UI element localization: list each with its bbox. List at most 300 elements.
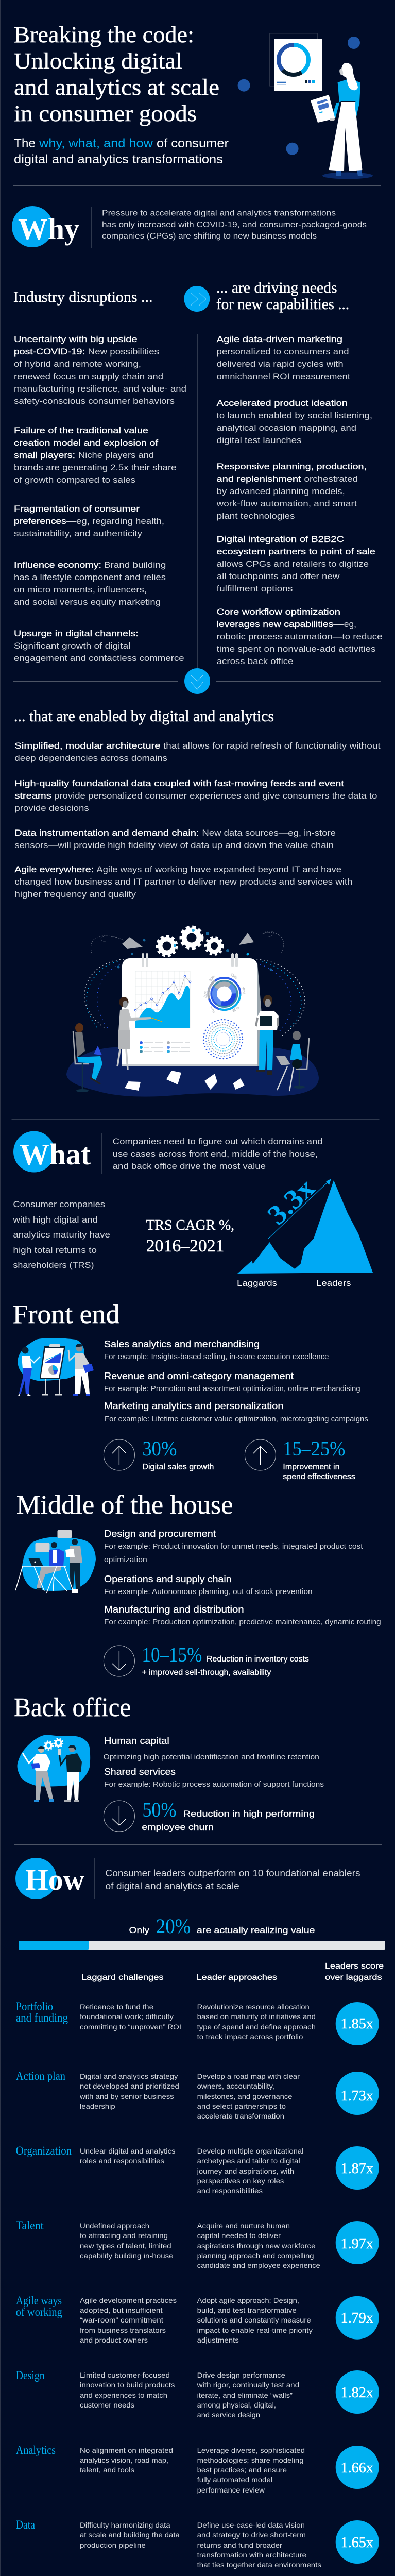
item: revenue management: For example: Promotion and assortment optimization, online merchandising bbox=[104, 1385, 360, 1393]
stat: spend effectiveness: spend effectiveness bbox=[283, 1472, 355, 1481]
enabler: agile: Agile ways of working have expanded beyond IT and have bbox=[96, 865, 341, 874]
heading: back office: Back office bbox=[14, 1693, 131, 1722]
table row: design: customer needs bbox=[80, 2401, 134, 2409]
stat: employee churn: Reduction in high performing bbox=[183, 1809, 315, 1819]
illustration: woman viewing a donut chart bbox=[238, 33, 373, 179]
item: operations: Operations and supply chain bbox=[104, 1574, 232, 1584]
figure: right man bbox=[69, 1746, 75, 1752]
capability: workflow: eg, bbox=[344, 619, 356, 629]
enabler: agile bbox=[14, 865, 352, 899]
table row: agile ways of working: build, and test transformative bbox=[197, 2306, 297, 2314]
chart: laggards vs leaders mountain: Laggards bbox=[237, 1278, 277, 1288]
stat: inventory costs bbox=[104, 1643, 309, 1677]
table row: organization: Develop multiple organizational bbox=[197, 2147, 304, 2155]
table row: action plan: accelerate transformation bbox=[197, 2112, 284, 2120]
table row: action plan: milestones, and governance bbox=[197, 2092, 293, 2100]
table row: data: at scale and building the data bbox=[80, 2531, 180, 2539]
illustration: two people at a chart board bbox=[18, 1338, 94, 1396]
disruption: fragmentation: sustainability, and authenticity bbox=[14, 529, 143, 538]
disruption: uncertainty: manufacturing resilience, and value- and bbox=[14, 384, 186, 394]
item: design and procurement: Design and procurement bbox=[104, 1529, 216, 1539]
item: manufacturing: For example: Production optimization, predictive maintenance, dynamic routing bbox=[104, 1618, 381, 1626]
table row: data: 1.65x bbox=[341, 2535, 373, 2551]
disruption: failure of value creation: small players: bbox=[14, 450, 75, 460]
capability: planning: Responsive planning, production, bbox=[217, 462, 367, 471]
table row: organization: perspectives on key roles bbox=[197, 2177, 284, 2185]
table row: analytics bbox=[16, 2444, 379, 2494]
table row: design: Limited customer-focused bbox=[80, 2371, 170, 2379]
table row: analytics: performance review bbox=[197, 2486, 265, 2494]
table row: analytics: Analytics bbox=[16, 2444, 56, 2456]
disruption: failure of value creation: brands are generating 2.5x their share bbox=[14, 463, 176, 472]
enabler: agile: Agile everywhere: bbox=[14, 865, 94, 874]
table row: data: production pipeline bbox=[80, 2541, 146, 2549]
item: marketing analytics: Marketing analytics and personalization bbox=[104, 1401, 283, 1411]
table row: talent: planning approach and compelling bbox=[197, 2251, 314, 2260]
table row: data bbox=[16, 2518, 379, 2569]
enabler: data: streams bbox=[14, 791, 51, 801]
subtitle: digital and analytics transformations bbox=[14, 152, 223, 166]
heading: TRS CAGR: 2016–2021 bbox=[146, 1236, 224, 1256]
what text: use cases across front end, middle of the house, bbox=[113, 1149, 318, 1159]
capability: product ideation: to launch enabled by social listening, bbox=[217, 411, 372, 420]
table row: portfolio and funding: and funding bbox=[16, 2011, 68, 2024]
what text: Companies need to figure out which domains and bbox=[113, 1137, 323, 1146]
capability: product ideation bbox=[217, 398, 372, 445]
disruption: failure of value creation: Niche players and bbox=[78, 450, 154, 460]
figure: seated with laptop bbox=[276, 1031, 309, 1091]
capability: marketing: delivered via rapid cycles with bbox=[217, 359, 344, 369]
enabler: agile: higher frequency and quality bbox=[14, 889, 136, 899]
capability: B2B2C: Digital integration of B2B2C bbox=[217, 534, 344, 544]
table row: organization: journey and aspirations, with bbox=[197, 2167, 294, 2175]
chart: laggards vs leaders mountain bbox=[237, 1172, 373, 1288]
title: Breaking the code: bbox=[14, 22, 194, 47]
capability: workflow bbox=[217, 607, 383, 666]
capability: B2B2C: all touchpoints and offer new bbox=[217, 571, 340, 581]
panel: industry disruptions list bbox=[14, 334, 186, 663]
table header: Leaders score bbox=[325, 1962, 384, 1971]
table row: data: that ties together data environments bbox=[197, 2561, 321, 2569]
disruption: uncertainty: Uncertainty with big upside bbox=[14, 334, 138, 344]
figure: standing woman bbox=[72, 1539, 78, 1545]
disruption: influence economy: on micro moments, influencers, bbox=[14, 585, 147, 595]
callout: only 20% realizing value bbox=[129, 1914, 315, 1938]
panel: enablers list bbox=[14, 741, 381, 899]
table row: agile ways of working: Agile ways bbox=[16, 2294, 62, 2307]
table row: data: returns and fund broader bbox=[197, 2541, 282, 2549]
illustration: people at a desk bbox=[15, 1530, 96, 1593]
table row: talent: Acquire and nurture human bbox=[197, 2222, 290, 2230]
chart: laggards vs leaders mountain: Leaders bbox=[316, 1278, 351, 1288]
table row: agile ways of working: 1.79x bbox=[341, 2310, 373, 2326]
what text bbox=[113, 1137, 323, 1171]
table row: portfolio and funding bbox=[16, 2000, 379, 2045]
enabler: instrumentation: sensors—will provide high fidelity view of data up and down the value chain bbox=[14, 840, 334, 850]
stat: digital sales growth bbox=[104, 1437, 214, 1471]
table row: design: Drive design performance bbox=[197, 2371, 285, 2379]
table row: agile ways of working bbox=[16, 2294, 379, 2344]
table row: action plan: Action plan bbox=[16, 2070, 65, 2082]
item: shared services bbox=[104, 1767, 324, 1789]
why text: Pressure to accelerate digital and analytics transformations bbox=[102, 209, 336, 217]
capability: marketing bbox=[217, 334, 350, 381]
table row: talent bbox=[16, 2219, 379, 2269]
enabler: instrumentation bbox=[14, 828, 336, 850]
heading: TRS CAGR bbox=[146, 1217, 234, 1256]
table row: design: with rigor, continually test and bbox=[197, 2381, 299, 2389]
what text: and back office drive the most value bbox=[113, 1161, 266, 1171]
table row: analytics: Leverage diverse, sophisticated bbox=[197, 2446, 305, 2454]
table row: action plan: 1.73x bbox=[341, 2088, 373, 2104]
heading: industry disruptions: Industry disruptions ... bbox=[13, 289, 152, 306]
capability: workflow: Core workflow optimization bbox=[217, 607, 340, 617]
table row: talent: Talent bbox=[16, 2219, 44, 2232]
table row: data: and strategy to drive short-term bbox=[197, 2531, 306, 2539]
table row: analytics: No alignment on integrated bbox=[80, 2446, 173, 2454]
disruption: failure of value creation: of growth compared to sales bbox=[14, 475, 135, 485]
table row: portfolio and funding: to track impact across portfolio bbox=[197, 2032, 303, 2041]
heading: front end: Front end bbox=[12, 1300, 119, 1329]
heading: driving needs: for new capabilities ... bbox=[216, 296, 349, 313]
line chart bbox=[134, 971, 191, 1028]
table row: action plan: Digital and analytics strategy bbox=[80, 2072, 178, 2080]
divider bbox=[14, 1844, 382, 1845]
table row: organization: roles and responsibilities bbox=[80, 2157, 164, 2165]
item: design and procurement bbox=[104, 1529, 363, 1564]
capability: B2B2C: ecosystem partners to point of sale bbox=[217, 547, 375, 556]
enabler: instrumentation: Data instrumentation and demand chain: bbox=[14, 828, 199, 838]
table row: agile ways of working: Adopt agile approach; Design, bbox=[197, 2296, 299, 2304]
table row: design: Design bbox=[16, 2369, 45, 2382]
title: in consumer goods bbox=[14, 101, 197, 126]
table row: agile ways of working: of working bbox=[16, 2306, 62, 2318]
table row: data: transformation with architecture bbox=[197, 2551, 306, 2559]
capability: planning: orchestrated bbox=[304, 474, 358, 484]
table row: portfolio and funding: 1.85x bbox=[341, 2016, 373, 2032]
panel: new capabilities list bbox=[216, 334, 383, 666]
divider bbox=[11, 1119, 379, 1120]
table row: agile ways of working: adjustments bbox=[197, 2336, 239, 2344]
table row: analytics: 1.66x bbox=[341, 2460, 373, 2476]
table row: organization: Unclear digital and analytics bbox=[80, 2147, 175, 2155]
text: TRS maturity: high total returns to bbox=[13, 1245, 97, 1255]
disruption: digital channels: Significant growth of digital bbox=[14, 641, 130, 651]
stat: employee churn bbox=[104, 1798, 315, 1832]
enabler: architecture: Simplified, modular architecture bbox=[14, 741, 161, 751]
table row: data: Difficulty harmonizing data bbox=[80, 2521, 170, 2529]
title: Unlocking digital bbox=[14, 48, 182, 74]
table row: talent: to attracting and retaining bbox=[80, 2231, 168, 2240]
capability: workflow: time spent on nonvalue-add activities bbox=[217, 644, 375, 654]
panel: back office bbox=[14, 1693, 324, 1832]
table row: agile ways of working: and product owners bbox=[80, 2336, 148, 2344]
table row: action plan: Develop a road map with clear bbox=[197, 2072, 300, 2080]
icon: down arrow badge bbox=[184, 668, 210, 694]
heading: enabled by digital and analytics: ... that are enabled by digital and analytics bbox=[14, 707, 274, 725]
item: design and procurement: optimization bbox=[104, 1556, 147, 1564]
disruption: fragmentation: eg, regarding health, bbox=[76, 516, 164, 526]
capability: planning: and replenishment bbox=[217, 474, 301, 484]
disruption: fragmentation: Fragmentation of consumer bbox=[14, 504, 140, 514]
capability: B2B2C: fulfillment options bbox=[217, 584, 293, 594]
illustration: team around a data board: 40% bbox=[241, 987, 246, 994]
disruption: uncertainty: renewed focus on supply chain and bbox=[14, 371, 163, 381]
how heading badge bbox=[15, 1858, 84, 1899]
enabler: instrumentation: New data sources—eg, in-store bbox=[202, 828, 336, 838]
capability: product ideation: digital test launches bbox=[217, 435, 302, 445]
disruption: influence economy bbox=[14, 560, 166, 607]
figure: seated with tablet bbox=[73, 1023, 102, 1092]
heading: driving needs bbox=[216, 279, 349, 313]
dot spiral bbox=[203, 1020, 243, 1059]
table row: talent: capital needed to deliver bbox=[197, 2231, 281, 2240]
illustration: two colleagues with gears bbox=[18, 1735, 90, 1802]
capability: product ideation: Accelerated product ideation bbox=[217, 398, 348, 408]
table row: agile ways of working: solutions and constantly measure bbox=[197, 2316, 311, 2324]
icon: right arrow badge bbox=[184, 286, 210, 312]
disruption: digital channels bbox=[14, 629, 184, 663]
table row: design: among physical, digital, bbox=[197, 2401, 276, 2409]
disruption: failure of value creation: Failure of the traditional value bbox=[14, 426, 148, 435]
table row: portfolio and funding: Reticence to fund the bbox=[80, 2003, 153, 2011]
disruption: uncertainty: of hybrid and remote working, bbox=[14, 359, 141, 369]
item: human capital: Human capital bbox=[104, 1736, 169, 1746]
illustration: team around a data board: 80% bbox=[209, 975, 216, 982]
illustration: team around a data board: 25% bbox=[203, 991, 208, 998]
callout: only 20% realizing value: 20% bbox=[156, 1914, 191, 1938]
chart: laggards vs leaders mountain: 3.3x bbox=[261, 1172, 321, 1231]
enabler: data bbox=[14, 778, 377, 813]
table row: talent: Undefined approach bbox=[80, 2222, 149, 2230]
disruption: uncertainty: New possibilities bbox=[88, 347, 159, 357]
table row: portfolio and funding: Portfolio bbox=[16, 2000, 53, 2013]
subtitle: The bbox=[14, 137, 36, 150]
table row: organization: Organization bbox=[16, 2144, 72, 2157]
table row: organization: archetypes and tailor to digital bbox=[197, 2157, 300, 2165]
enabler: architecture: that allows for rapid refresh of functionality without bbox=[163, 741, 381, 751]
disruption: influence economy: Influence economy: bbox=[14, 560, 101, 570]
item: human capital bbox=[104, 1736, 319, 1761]
disruption: fragmentation: preferences— bbox=[14, 516, 76, 526]
item: revenue management: Revenue and omni-category management bbox=[104, 1371, 294, 1381]
table row: organization bbox=[16, 2144, 379, 2195]
panel: front end bbox=[12, 1300, 368, 1481]
stat: employee churn: employee churn bbox=[142, 1822, 214, 1832]
capability: product ideation: analytical occasion mapping, and bbox=[217, 423, 356, 433]
item: sales analytics: Sales analytics and merchandising bbox=[104, 1339, 260, 1349]
table row: agile ways of working: adopted, but insufficient bbox=[80, 2306, 163, 2314]
table row: analytics: methodologies; share modeling bbox=[197, 2456, 304, 2464]
table row: organization: and responsibilities bbox=[197, 2187, 263, 2195]
table row: portfolio and funding: foundational work; difficulty bbox=[80, 2012, 174, 2021]
how text bbox=[105, 1868, 360, 1891]
enabler: agile: changed how business and IT partner to deliver new products and services with bbox=[14, 877, 352, 887]
disruption: failure of value creation bbox=[14, 426, 176, 485]
disruption: uncertainty: safety-conscious consumer behaviors bbox=[14, 396, 175, 406]
stat: spend effectiveness: 15–25% bbox=[283, 1437, 345, 1460]
item: shared services: For example: Robotic process automation of support functions bbox=[104, 1781, 324, 1789]
panel: middle of the house bbox=[15, 1490, 381, 1677]
donut chart bbox=[208, 978, 240, 1010]
figure: presenter bbox=[117, 997, 162, 1070]
item: sales analytics bbox=[104, 1339, 329, 1361]
heading: TRS CAGR: TRS CAGR %, bbox=[146, 1217, 234, 1233]
table row: design: 1.82x bbox=[341, 2385, 373, 2401]
paper planes bbox=[122, 937, 143, 949]
divider bbox=[13, 185, 381, 186]
table row: design: innovation to build products bbox=[80, 2381, 175, 2389]
capability: marketing: omnichannel ROI measurement bbox=[217, 371, 350, 381]
why heading badge: Why bbox=[18, 212, 79, 246]
subtitle bbox=[14, 137, 229, 166]
callout: only 20% realizing value: are actually realizing value bbox=[197, 1925, 315, 1935]
table row: analytics: fully automated model bbox=[197, 2476, 272, 2484]
text: TRS maturity: analytics maturity have bbox=[13, 1230, 110, 1240]
desk bbox=[28, 1558, 43, 1566]
item: marketing analytics bbox=[104, 1401, 368, 1423]
table row: design: and experiences to match bbox=[80, 2391, 167, 2399]
table row: action plan: with and by senior business bbox=[79, 2092, 174, 2100]
illustration: team around a data board: 75% bbox=[208, 1006, 216, 1014]
how text: of digital and analytics at scale bbox=[105, 1881, 239, 1891]
table row: action plan: owners, accountability, bbox=[197, 2082, 274, 2090]
how text: Consumer leaders outperform on 10 foundational enablers bbox=[105, 1868, 360, 1878]
enabler: data: High-quality foundational data coupled with fast-moving feeds and event bbox=[14, 778, 344, 788]
table row: talent: capability building in-house bbox=[80, 2251, 174, 2260]
capability: planning: by advanced planning models, bbox=[217, 486, 345, 496]
dotted arcs bbox=[84, 959, 305, 1036]
table row: action plan: and select partnerships to bbox=[197, 2102, 286, 2110]
table row: agile ways of working: “war-room” commitment bbox=[80, 2316, 163, 2324]
stat: inventory costs: + improved sell-through, availability bbox=[142, 1668, 271, 1677]
item: shared services: Shared services bbox=[104, 1767, 176, 1777]
capability: marketing: Agile data-driven marketing bbox=[217, 334, 342, 344]
heading: middle of the house: Middle of the house bbox=[16, 1490, 233, 1520]
item: operations bbox=[104, 1574, 313, 1596]
table header: Leader approaches bbox=[197, 1973, 277, 1982]
text: TRS maturity: Consumer companies bbox=[13, 1199, 105, 1209]
figure: left man bbox=[38, 1747, 44, 1753]
board bbox=[257, 963, 263, 1066]
progress bar: 20% bbox=[19, 1941, 385, 1950]
table row: agile ways of working: Agile development practices bbox=[80, 2296, 177, 2304]
disruption: uncertainty bbox=[14, 334, 186, 406]
capability: planning bbox=[216, 462, 367, 521]
figure: seated man bbox=[51, 1542, 57, 1548]
subtitle: of consumer bbox=[157, 137, 229, 150]
table row: talent: candidate and employee experience bbox=[197, 2261, 320, 2269]
stat: digital sales growth: 30% bbox=[142, 1437, 177, 1460]
table row: agile ways of working: impact to enable real-time priority bbox=[197, 2326, 313, 2334]
item: operations: For example: Autonomous planning, out of stock prevention bbox=[104, 1588, 313, 1596]
text: TRS maturity bbox=[12, 1199, 110, 1270]
stat: spend effectiveness: Improvement in bbox=[283, 1463, 340, 1471]
capability: B2B2C bbox=[217, 534, 375, 594]
table row: analytics: talent, and tools bbox=[80, 2466, 134, 2474]
table row: portfolio and funding: based on maturity of initiatives and bbox=[197, 2012, 316, 2021]
enabler: data: provide personalized consumer experiences and give consumers the data to bbox=[54, 791, 377, 801]
table row: agile ways of working: from business translators bbox=[80, 2326, 166, 2334]
table header: over laggards bbox=[325, 1973, 382, 1982]
disruption: digital channels: engagement and contactless commerce bbox=[14, 653, 184, 663]
enabler: data: provide desicions bbox=[14, 803, 89, 813]
capability: workflow: leverages new capabilities— bbox=[217, 619, 344, 629]
capability: marketing: personalized to consumers and bbox=[217, 347, 349, 357]
table row: analytics: best practices; and ensure bbox=[197, 2466, 287, 2474]
table row: design: and service design bbox=[197, 2411, 260, 2419]
disruption: fragmentation bbox=[14, 504, 164, 538]
stat: inventory costs: Reduction in inventory costs bbox=[207, 1655, 309, 1664]
capability: workflow: robotic process automation—to reduce bbox=[217, 632, 383, 641]
item: manufacturing: Manufacturing and distribution bbox=[104, 1604, 244, 1615]
table row: design bbox=[16, 2369, 379, 2419]
title: and analytics at scale bbox=[14, 75, 219, 100]
text: TRS maturity: shareholders (TRS) bbox=[13, 1260, 94, 1270]
table row: portfolio and funding: committing to “unproven” ROI bbox=[80, 2023, 181, 2031]
title bbox=[14, 22, 219, 126]
table row: design: iterate, and eliminate “walls” bbox=[197, 2391, 293, 2399]
what heading badge: What bbox=[20, 1138, 91, 1171]
disruption: influence economy: and social versus equity marketing bbox=[14, 597, 161, 607]
table row: action plan: not developed and prioritized bbox=[80, 2082, 179, 2090]
why text bbox=[102, 209, 367, 241]
subtitle: why, what, and how bbox=[39, 137, 153, 150]
table row: action plan bbox=[16, 2070, 379, 2120]
how heading badge: How bbox=[25, 1863, 84, 1896]
why text: has only increased with COVID-19, and consumer-packaged-goods bbox=[102, 221, 367, 229]
disruption: uncertainty: post-COVID-19: bbox=[14, 347, 85, 357]
table row: talent: 1.97x bbox=[341, 2236, 373, 2252]
enabler: architecture bbox=[14, 741, 381, 763]
disruption: influence economy: Brand building bbox=[104, 560, 166, 570]
stat: employee churn: 50% bbox=[142, 1798, 176, 1821]
table row: action plan: leadership bbox=[80, 2102, 115, 2110]
item: design and procurement: For example: Product innovation for unmet needs, integrated product cost bbox=[104, 1543, 363, 1551]
table header: Laggard challenges bbox=[81, 1973, 164, 1982]
enabler: architecture: deep dependencies across domains bbox=[14, 753, 167, 763]
capability: workflow: across back office bbox=[217, 656, 294, 666]
stat: digital sales growth: Digital sales growth bbox=[142, 1463, 214, 1471]
callout: only 20% realizing value: Only bbox=[129, 1925, 150, 1935]
table row: portfolio and funding: type of spend and define approach bbox=[197, 2023, 316, 2031]
item: sales analytics: For example: Insights-based selling, in-store execution excellence bbox=[104, 1353, 329, 1361]
why text: companies (CPGs) are shifting to new business models bbox=[102, 232, 317, 241]
heading: driving needs: ... are driving needs bbox=[216, 279, 337, 296]
table row: talent: new types of talent, limited bbox=[80, 2242, 171, 2250]
illustration: team around a data board: 85% bbox=[232, 1006, 240, 1013]
capability: planning: work-flow automation, and smart bbox=[216, 499, 357, 509]
capability: planning: plant technologies bbox=[217, 511, 295, 521]
illustration: team around a data board bbox=[66, 927, 319, 1097]
gears bbox=[157, 927, 222, 956]
table row: data: Data bbox=[16, 2518, 35, 2531]
text: TRS maturity: with high digital and bbox=[12, 1215, 98, 1225]
illustration: team around a data board: 55% bbox=[230, 973, 237, 980]
item: human capital: Optimizing high potential identification and frontline retention bbox=[104, 1753, 319, 1761]
item: manufacturing bbox=[104, 1604, 381, 1626]
disruption: influence economy: has a lifestyle component and relies bbox=[14, 572, 166, 582]
table row: analytics: analytics vision, road map, bbox=[80, 2456, 168, 2464]
item: marketing analytics: For example: Lifetime customer value optimization, microtargeting campaigns bbox=[105, 1415, 368, 1423]
capability: B2B2C: allows CPGs and retailers to digitize bbox=[217, 559, 369, 569]
figure: woman bbox=[22, 1347, 29, 1354]
stat: spend effectiveness bbox=[245, 1437, 355, 1481]
figure: man with tablet bbox=[256, 995, 279, 1075]
disruption: digital channels: Upsurge in digital channels: bbox=[14, 629, 139, 638]
table row: talent: aspirations through new workforce bbox=[197, 2242, 316, 2250]
papers on the floor bbox=[125, 1081, 141, 1091]
